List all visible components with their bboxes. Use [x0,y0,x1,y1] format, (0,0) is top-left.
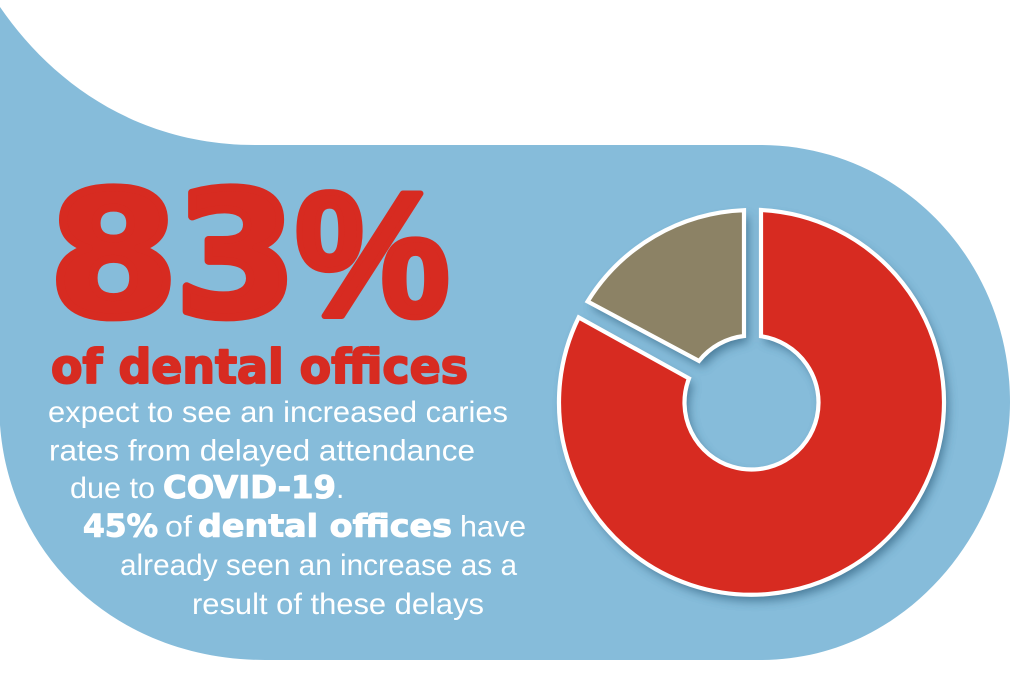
line 4 [83,508,526,544]
subheading: of dental offices: of dental offices [51,340,468,395]
line 4: have [460,510,526,544]
line 4: 45% [83,508,158,544]
chart shadow [563,216,948,601]
line 1: expect to see an increased caries [48,396,508,429]
line 3: due to [70,472,155,505]
headline: 83%: 8 [49,155,178,356]
line 4: dental offices [198,508,452,544]
line 3 [70,470,344,506]
line 5: already seen an increase as a [120,549,517,582]
headline: 83%: 3 [175,155,297,356]
headline: 83% [49,155,450,356]
line 3: . [336,472,344,505]
line 6: result of these delays [192,588,484,621]
slice: tan remainder [588,210,744,361]
headline: 83%: % [295,155,450,354]
donut chart [559,210,948,601]
body text [48,396,526,621]
slice: red 83 percent [559,210,944,595]
line 4: of [165,510,193,544]
line 3: COVID-19 [163,470,336,506]
line 2: rates from delayed attendance [49,434,475,468]
